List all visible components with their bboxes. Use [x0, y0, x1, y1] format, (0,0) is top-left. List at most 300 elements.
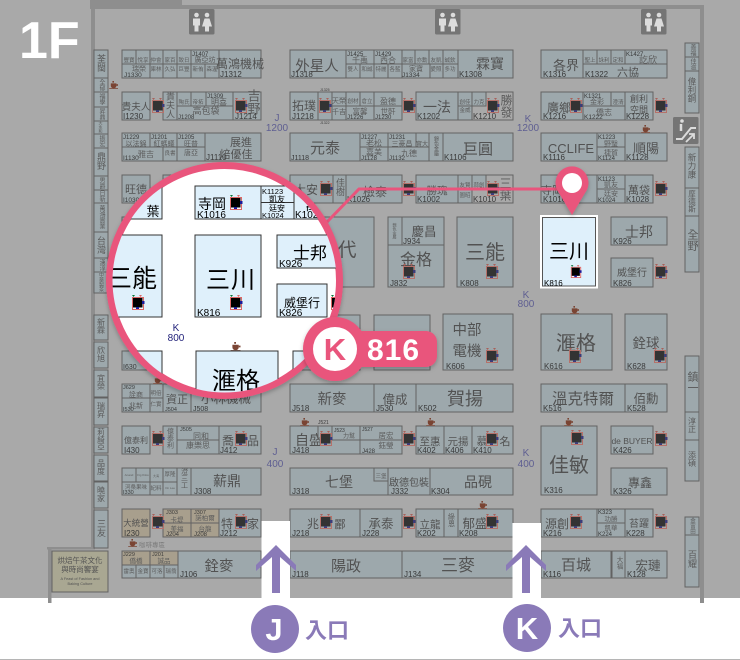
booth row 4: 萬袋: [628, 183, 650, 197]
white entrance gaps: [262, 521, 541, 599]
booth row 1: 訖欣: [639, 54, 657, 65]
left wall booth column: 瑞昇: [96, 401, 106, 419]
booth row 4: 圖昭: [459, 192, 471, 199]
magnifier: enlarged booth view: 三能: [107, 265, 157, 293]
booth row 10: 苔躍: [629, 517, 649, 530]
booth row 8: 慕: [476, 434, 488, 448]
aisle labels: K: [523, 448, 530, 459]
booth row 3: 旺普: [184, 139, 198, 148]
booth row 3: J1231: [389, 135, 406, 141]
booth row 11: J118: [292, 570, 309, 579]
booth row 2: J1218: [292, 112, 314, 121]
booth row 8: 居宏: [378, 430, 394, 440]
booth row 8: J523: [334, 428, 345, 434]
left wall booth column: 福學: [98, 92, 105, 106]
right wall booth column: [685, 43, 699, 587]
magnifier: enlarged booth view: 葉: [146, 204, 160, 219]
booth row 2: 富馨: [352, 106, 368, 116]
booth row 7: 資正: [166, 393, 188, 406]
booth row 9: [122, 467, 667, 496]
left wall booth column: 三友: [96, 519, 106, 538]
left wall booth column: 昇鼎: [98, 108, 105, 121]
magnifier: enlarged booth view: 800: [168, 333, 185, 344]
booth row 7: 詮商: [129, 390, 143, 399]
booth row 5: J934: [403, 237, 421, 246]
booth row 11: 大福: [615, 555, 623, 571]
booth row 2: K1321: [584, 94, 602, 100]
booth row 6: K606: [446, 362, 465, 371]
magnifier: enlarged booth view: K826: [279, 308, 303, 319]
booth row 7: 仁實: [150, 400, 162, 408]
booth row 10: 功勝: [604, 514, 618, 523]
booth row 7: 明倍: [150, 389, 162, 397]
booth row 6: [122, 314, 667, 371]
highlighted booth: 三川 K816: K816: [544, 279, 563, 288]
magnifier: enlarged booth view: 士邦: [293, 244, 327, 263]
icon: restroom right: [641, 9, 666, 34]
booth row 4: 廷安: [604, 189, 618, 198]
booth row 1: 家百: [164, 56, 176, 64]
J entrance label: J: [265, 612, 283, 647]
booth row 9: J318: [292, 487, 310, 496]
booth badge: K 816: K: [324, 332, 347, 367]
booth row 5: K926: [613, 237, 632, 246]
booth row 11: J201: [152, 552, 164, 558]
highlighted booth: 三川 K816: [541, 216, 597, 288]
booth row 1: J1330: [124, 72, 142, 79]
booth row 1: J1429: [375, 52, 392, 58]
booth row 3: 嘉美: [366, 147, 382, 157]
booth row 2: 創利: [630, 93, 648, 104]
booth row 10: K208: [459, 529, 478, 538]
icon: restroom centre: [435, 9, 460, 34]
booth row 10: J228: [362, 529, 380, 538]
booth row 3: 元泰: [310, 140, 340, 157]
booth row 1: 各藍: [389, 65, 401, 73]
booth row 11: J229: [123, 552, 135, 558]
booth row 11: 陽政: [331, 558, 361, 575]
booth row 1: 各界: [553, 58, 579, 73]
booth row 2: K1210: [473, 112, 497, 121]
aisle labels: K: [525, 114, 532, 125]
booth row 11: 瑞翁: [165, 567, 177, 575]
coffee zone label: 咖啡專區: [139, 540, 166, 549]
booth row 3: 實大: [416, 140, 428, 148]
booth row 4: 蒜創: [473, 181, 485, 189]
booth row 4: K1024: [598, 198, 616, 204]
booth row 9: Fig Kilos: [137, 473, 149, 477]
left wall booth column: 荃閩: [96, 53, 106, 73]
booth row 1: 多功: [444, 65, 456, 73]
booth row 10: 綠恩: [448, 512, 455, 527]
aisle labels: J: [272, 447, 278, 458]
booth row 2: 天榮: [332, 96, 346, 105]
booth row 2: J1309: [207, 94, 224, 100]
booth row 9: 河桑果味: [125, 483, 147, 491]
booth row 4: I1030: [123, 197, 140, 204]
booth row 7: 佰勳: [633, 391, 659, 406]
booth row 1: J1312: [220, 70, 242, 79]
booth row 5: K808: [460, 279, 479, 288]
booth row 1: 友凱: [430, 56, 442, 64]
booth row 1: J1318: [291, 70, 313, 79]
booth row 10: 家: [247, 516, 259, 531]
booth row 11: 宏璉: [635, 558, 661, 573]
booth row 10: 卡堤: [170, 515, 184, 524]
magnifier: enlarged booth view: K1016: [197, 210, 226, 221]
magnifier: enlarged booth view: K816: [197, 308, 221, 319]
booth row 2: 倉立: [361, 97, 373, 105]
booth row 3: 紅螞蟻: [154, 139, 174, 148]
booth row 8: J505: [180, 427, 192, 433]
booth row 1: 瑞榮: [132, 64, 146, 73]
booth row 10: 大統營: [123, 518, 149, 528]
highlighted booth: 三川 K816: 三川: [549, 241, 589, 263]
booth row 1: 家寶: [409, 64, 423, 73]
booth row 2: 帝拓: [192, 98, 204, 106]
J entrance label: 入口: [305, 618, 349, 643]
booth row 2: 千吉: [332, 107, 346, 116]
aisle labels: K: [523, 290, 530, 301]
booth row 9: 紀料: [150, 484, 162, 492]
booth row 9: I330: [123, 490, 134, 496]
panel: 烘焙午茶文化: Baking Culture: [68, 582, 92, 586]
booth row 10: 源創: [545, 517, 569, 531]
left wall booth column: 台灣: [96, 235, 106, 255]
booth row 1: 森渥: [206, 65, 218, 73]
booth row 3: 雅吉: [138, 149, 154, 159]
booth row 9: 專鑫: [628, 475, 652, 490]
booth row 7: J530: [376, 404, 394, 413]
booth row 7: J508: [193, 406, 208, 413]
booth row 1: 定和: [612, 56, 624, 64]
magnifier: enlarged booth view: 滙格: [212, 368, 260, 395]
booth row 3: J1229: [123, 135, 140, 141]
panel: 烘焙午茶文化: 烘焙午茶文化: [58, 555, 103, 565]
booth row 4: 三葉: [498, 177, 512, 201]
left wall booth column: 大永和: [98, 120, 104, 134]
booth row 8: J527: [362, 427, 373, 433]
booth row 2: K1202: [417, 112, 441, 121]
coffee zone label: [128, 539, 166, 549]
booth row 8: 喬: [222, 434, 234, 448]
booth row 1: K1322: [585, 70, 609, 79]
booth row 8: I430: [124, 446, 140, 455]
booth row 9: 啟德包裝: [389, 476, 429, 489]
booth row 3: 以法錦: [126, 139, 146, 148]
booth row 11: K128: [627, 570, 646, 579]
magnifier: enlarged booth view: 廷安: [269, 203, 285, 213]
booth row 1: 庫林: [150, 65, 162, 73]
left wall booth column: 萬鴻實業: [98, 204, 105, 230]
booth row 11: 百城: [561, 557, 591, 574]
booth row 10: K216: [543, 529, 562, 538]
booth row 2: 一法: [423, 99, 451, 115]
booth row 3: CCLIFE: [548, 141, 594, 156]
left wall booth column: 鼎野: [96, 152, 106, 170]
booth row 3: K1124: [598, 156, 616, 162]
booth row 2: 貴夫人: [165, 90, 175, 118]
booth row 7: 偉成: [382, 392, 408, 407]
booth row 8: 康樂思: [186, 440, 210, 450]
booth row 10: J218: [292, 529, 310, 538]
booth row 4: K1026: [347, 195, 371, 204]
booth row 5: K826: [613, 279, 632, 288]
booth row 5: J832: [390, 279, 408, 288]
booth row 10: I230: [124, 529, 140, 538]
booth row 9: 大海: [153, 473, 159, 478]
booth row 4: [122, 175, 653, 204]
left wall booth column: 曉家: [96, 485, 106, 502]
panel: 烘焙午茶文化: [52, 551, 108, 592]
booth row 2: 高包袋: [192, 105, 220, 116]
booth row 11: 金寶: [137, 567, 149, 575]
right wall booth column: 全野: [686, 229, 698, 251]
right wall booth column: 添碩: [688, 451, 696, 468]
booth row 4: 寺岡: [541, 184, 563, 197]
booth row 8: 鈺瑩: [378, 440, 394, 450]
booth row 10: K224: [598, 532, 613, 538]
booth row 6: K628: [627, 362, 646, 371]
aisle labels: 1200: [517, 123, 540, 134]
booth row 1: K1316: [543, 70, 567, 79]
booth row 3: 良書: [164, 149, 176, 157]
booth row 7: K502: [418, 404, 437, 413]
booth row 1: 家富: [402, 56, 414, 64]
booth row 3: 巨圓: [463, 141, 493, 158]
left wall booth column: 男爵: [98, 177, 105, 190]
booth row 1: J1407: [192, 52, 209, 58]
right wall booth column: 金富田: [689, 517, 696, 536]
booth row 2: 明喜: [211, 97, 227, 107]
booth row 1: 六協: [617, 66, 639, 79]
booth row 4: 勝瑰: [426, 184, 448, 197]
booth row 3: J1201: [151, 135, 168, 141]
booth row 3: I1130: [123, 155, 139, 162]
booth row 2: J1226: [347, 115, 364, 121]
booth row 7: K516: [543, 404, 562, 413]
booth row 1: 特麗: [375, 65, 387, 73]
booth row 3: 唐亞: [184, 148, 198, 157]
booth row 4: 佳樹: [335, 177, 345, 197]
booth row 2: 吉野: [246, 89, 260, 115]
booth row 3: [122, 133, 667, 162]
booth row 9: J308: [194, 487, 212, 496]
left wall booth column: 漢淳: [98, 258, 105, 272]
right wall booth column: 佳滋: [689, 57, 696, 71]
icon: restroom left: [189, 9, 214, 34]
booth row 3: 捷賀: [604, 148, 618, 157]
booth row 6: 電機: [452, 343, 482, 360]
booth row 8: K406: [445, 446, 464, 455]
aisle labels: [266, 113, 540, 470]
left wall booth column: 日新: [98, 190, 105, 203]
booth row 2: 貴夫人: [122, 101, 151, 113]
booth row 7: [122, 384, 667, 413]
J entrance label: [251, 605, 349, 653]
booth row 1: 詠利: [598, 56, 610, 64]
booth row 10: K202: [417, 529, 436, 538]
location pin: [556, 166, 588, 215]
aisle labels: J: [274, 113, 280, 124]
booth row 4: K1028: [626, 195, 650, 204]
booth row 6: I630: [123, 364, 137, 371]
magnifier: enlarged booth view: K1024: [262, 211, 284, 220]
booth row 8: K426: [613, 446, 632, 455]
booth row 7: I530: [123, 407, 134, 413]
booth row 3: 三豪昌: [392, 139, 412, 148]
booth row 10: J303: [166, 510, 178, 516]
booth row 9: 三堡: [375, 472, 387, 480]
booth row 4: K1016: [543, 195, 567, 204]
booth row 1: 聖上: [584, 56, 596, 64]
booth row 4: 大安: [294, 182, 318, 197]
icon: escalator: [673, 117, 698, 144]
arrow: K entrance: [506, 545, 546, 593]
booth row 1: K1308: [459, 70, 483, 79]
booth row 2: 空間: [630, 104, 648, 115]
booth row 10: J204: [166, 532, 180, 538]
aisle labels: 400: [267, 459, 284, 470]
booth row 9: Anand: [125, 473, 134, 477]
magnifier: enlarged booth view: 寺岡: [198, 196, 226, 212]
booth row 10: 立龍: [420, 518, 441, 531]
booth row 3: 野瑿: [604, 139, 618, 148]
right wall booth column: 摩德斯: [687, 188, 696, 213]
booth row 11: J134: [404, 570, 422, 579]
booth row 3: 九德: [401, 148, 417, 158]
booth row 3: 展進: [230, 136, 252, 149]
booth row 11: 誠品: [158, 556, 170, 565]
booth row 8: 佳敏: [549, 454, 589, 477]
booth row 3: K1116: [543, 153, 565, 162]
booth row 1: [122, 50, 667, 79]
booth row 8: 億泰利: [124, 435, 148, 445]
booth row 10: 酈: [334, 518, 346, 531]
booth row 2: 創材: [347, 97, 359, 105]
booth row 1: 致日: [178, 56, 190, 64]
K entrance label: K: [516, 611, 539, 646]
booth row 2: 金彩: [590, 97, 604, 106]
booth row 1: K1427: [626, 52, 644, 58]
booth row 1: J1425: [347, 52, 364, 58]
aisle labels: 800: [518, 299, 535, 310]
booth row 3: J1118: [291, 155, 309, 162]
left wall booth column: 莉綺亞: [96, 426, 106, 450]
booth row 2: 世軒: [380, 106, 396, 116]
booth row 2: K1222: [584, 114, 603, 121]
booth row 2: 拓璞: [292, 99, 316, 113]
magnifier: enlarged booth view: K: [173, 323, 180, 334]
booth row 10: J307: [194, 510, 206, 516]
booth row 2: J1230: [375, 115, 392, 121]
booth row 11: 雷奧: [123, 567, 135, 575]
booth row 11: 銓麥: [204, 558, 234, 575]
magnifier: enlarged booth view: 威堡行: [284, 295, 320, 310]
booth row 3: 老松: [366, 138, 382, 148]
booth row 3: J1132: [389, 156, 406, 162]
magnifier: enlarged booth view: [104, 162, 345, 403]
booth row 3: J1205: [178, 135, 195, 141]
booth row 3: K1223: [598, 135, 616, 141]
booth row 9: On Lee: [165, 486, 175, 490]
magnifier: enlarged booth view: K926: [279, 259, 303, 270]
right wall booth column: 鎮一: [686, 370, 698, 393]
booth badge: K 816: 816: [367, 334, 420, 367]
magnifier: enlarged booth view: K1123: [262, 187, 283, 196]
booth row 11: K116: [543, 570, 562, 579]
booth row 1: 雙人: [347, 65, 359, 73]
booth row 4: 旺德: [125, 182, 147, 196]
booth row 2: 金威: [459, 106, 471, 114]
booth row 1: 西合: [380, 55, 396, 65]
right wall booth column: 淳正: [688, 416, 696, 433]
booth row 2: 僑志: [596, 107, 612, 117]
booth row 2: K1228: [626, 112, 650, 121]
right wall booth column: 百耀: [687, 550, 697, 568]
booth row 8: 至惠: [420, 435, 440, 448]
booth row 8: K410: [473, 446, 492, 455]
booth row 3: 錦色金屬: [433, 135, 439, 157]
bottom rule: [0, 659, 740, 660]
booth row 8: [122, 420, 653, 495]
booth row 8: 名: [500, 434, 510, 448]
booth row 8: K316: [544, 486, 563, 495]
booth row 3: K1128: [626, 153, 649, 162]
aisle labels: 1200: [266, 123, 289, 134]
booth row 4: K1123: [598, 177, 616, 183]
left wall booth column: 中華製茶: [98, 271, 104, 293]
booth row 2: 勝發: [499, 93, 513, 118]
booth row 5: 代: [337, 239, 357, 261]
aisle labels: 400: [518, 459, 535, 470]
booth row 4: 凱友: [604, 180, 618, 189]
booth row 2: J1214: [235, 112, 257, 121]
booth row 5: [122, 217, 667, 288]
booth row 7: J518: [292, 404, 310, 413]
booth row 7: J629: [123, 385, 135, 391]
left wall booth column: 振宏: [98, 134, 105, 148]
booth row 10: J212: [220, 529, 238, 538]
booth row 8: 自盛: [295, 432, 323, 448]
left wall booth column: 欣旭: [96, 345, 106, 363]
booth row 10: 美福: [170, 524, 184, 533]
booth row 8: de BUYER: [611, 436, 653, 446]
booth row 10: 台龍: [198, 524, 212, 533]
right wall booth column: 善福: [689, 43, 696, 57]
booth row 1: 豐寶: [123, 56, 135, 64]
booth row 11: 可洛: [151, 567, 163, 575]
booth row 1: 愛照: [430, 65, 442, 73]
booth row 9: K326: [613, 487, 632, 496]
booth row 5: 三能: [465, 241, 505, 264]
panel: 烘焙午茶文化: A Feast of Fashion and: [60, 577, 100, 581]
left wall booth column: [94, 50, 108, 548]
booth row 10: 凱華: [604, 523, 618, 532]
booth row 10: J208: [194, 532, 208, 538]
magnifier: enlarged booth view: 萬: [305, 198, 319, 213]
arrow: J entrance: [256, 545, 296, 593]
booth row 6: 中部: [452, 322, 482, 339]
coffee icons: [109, 81, 650, 509]
booth row 7: J504: [165, 407, 177, 413]
booth row 2: 廣鄉: [547, 101, 571, 115]
booth row 11: [122, 551, 667, 579]
booth row 10: [122, 509, 653, 538]
booth row 1: 和誠: [361, 65, 373, 73]
booth row 1: 誠欽: [444, 56, 456, 64]
booth row 8: J521: [318, 420, 329, 426]
